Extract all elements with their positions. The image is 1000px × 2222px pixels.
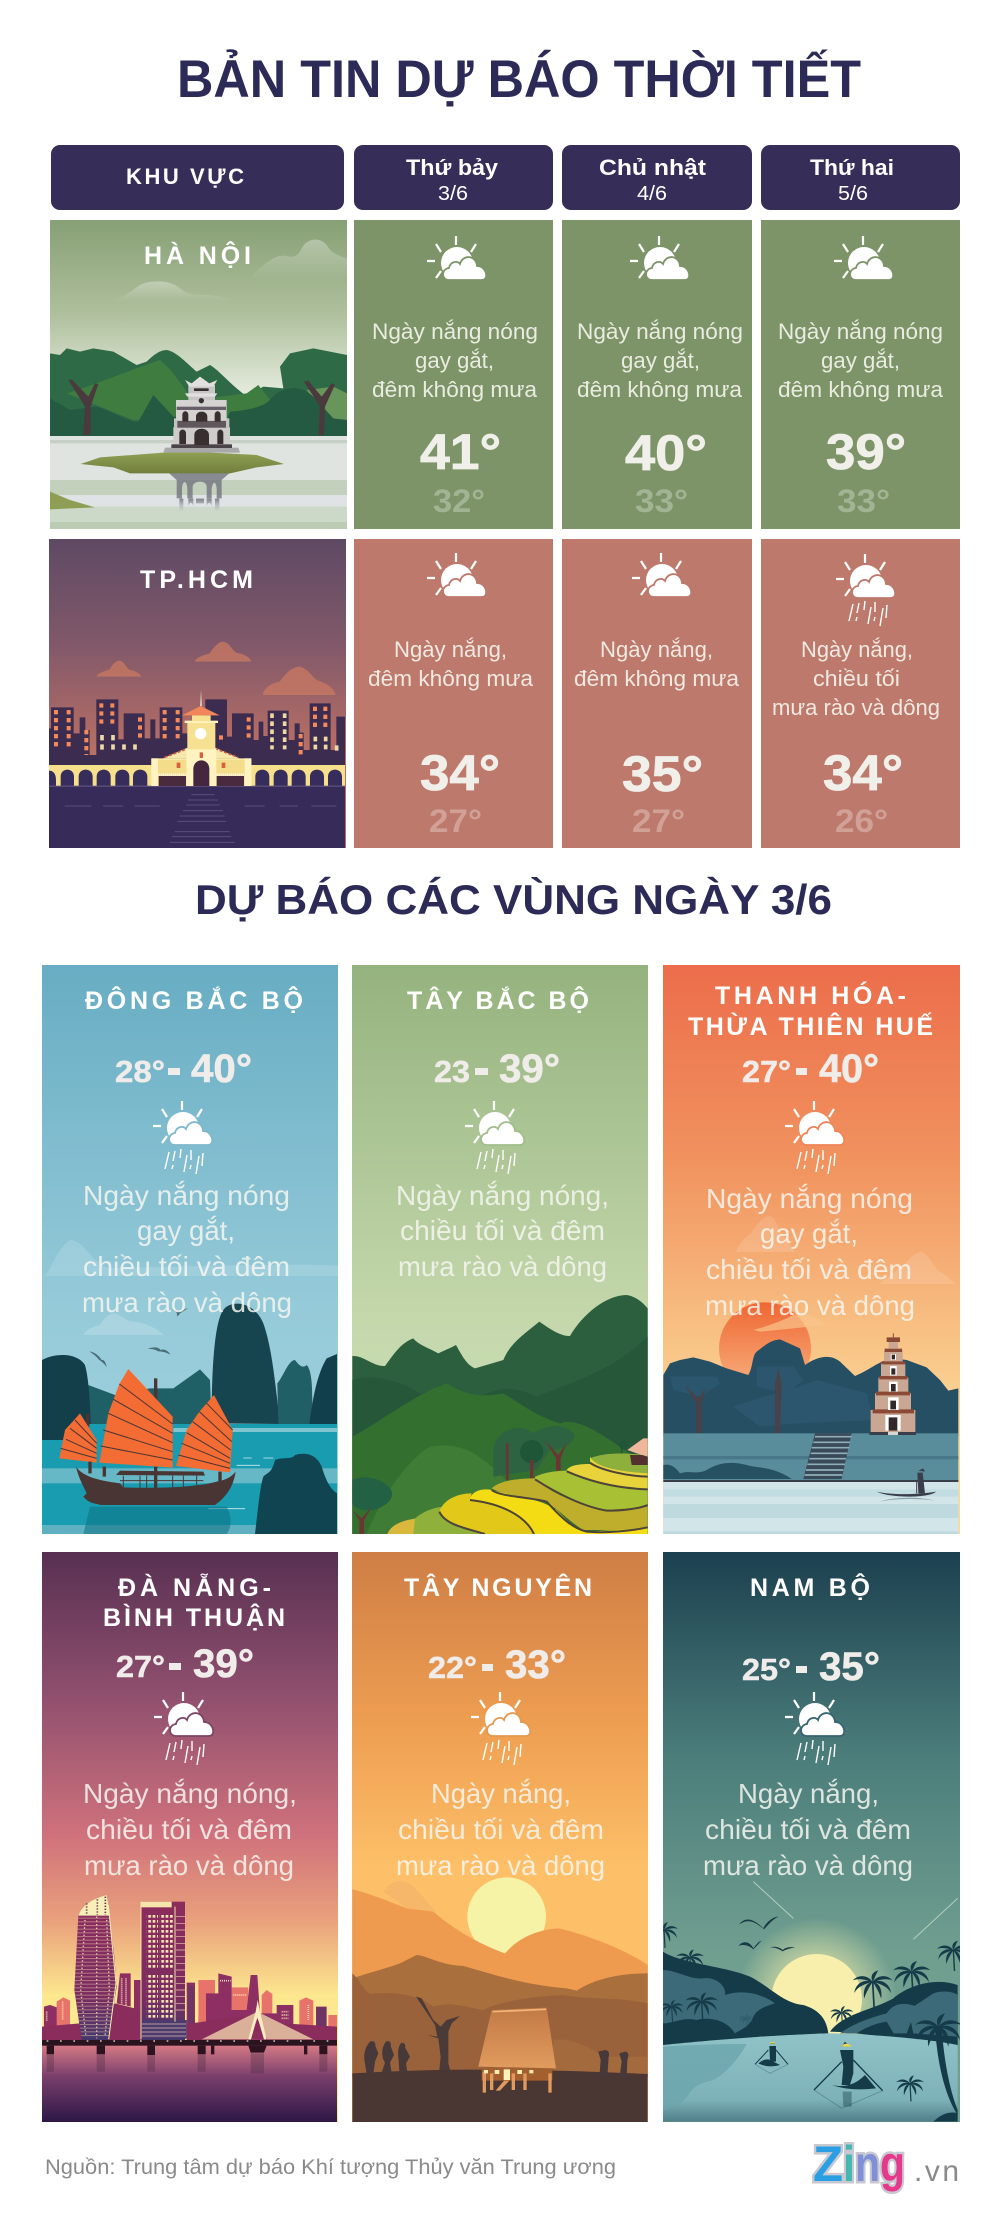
weather cell: Hà Nội Chủ nhật: 33° <box>635 483 688 519</box>
weather cell: Hà Nội Thứ bảy: gay gắt, <box>415 348 494 373</box>
forecast text: chiều tối và đêm <box>400 1215 605 1246</box>
heading: Hà Nội: HÀ NỘI <box>144 240 251 270</box>
logo: Zing.vn: i <box>843 2136 855 2192</box>
temperature range: 27° <box>742 1054 791 1089</box>
icon: sun, cloud and rain <box>153 1101 212 1174</box>
logo: Zing.vn: n <box>855 2136 880 2192</box>
temperature range: 40° <box>191 1047 252 1091</box>
logo: Zing.vn: .vn <box>914 2155 959 2188</box>
panel: TP.HCM illustration <box>49 539 346 848</box>
forecast text: gay gắt, <box>137 1215 235 1246</box>
section heading: DỰ BÁO CÁC VÙNG NGÀY 3/6 <box>195 875 832 923</box>
forecast text: mưa rào và dông <box>703 1850 913 1881</box>
forecast text: mưa rào và dông <box>82 1287 292 1318</box>
icon: sun, cloud and rain <box>465 1101 524 1174</box>
weather cell: Hà Nội Thứ hai: gay gắt, <box>821 348 900 373</box>
header: thứ hai: 5/6 <box>838 183 868 205</box>
weather cell: TP.HCM Thứ hai: 34° <box>823 745 903 801</box>
icon: Bến Thành market <box>151 690 251 786</box>
weather cell: Hà Nội Thứ bảy: đêm không mưa <box>372 377 538 402</box>
temperature range: 28° <box>115 1054 165 1089</box>
weather cell: TP.HCM Thứ hai: mưa rào và dông <box>772 695 940 720</box>
header: thứ hai <box>761 145 960 210</box>
weather cell: Hà Nội Chủ nhật: 40° <box>625 425 707 481</box>
icon: birds <box>89 1308 188 1367</box>
header: chủ nhật: Chủ nhật <box>599 155 707 180</box>
heading: Thanh Hóa - Thừa Thiên Huế: THANH HÓA- <box>715 980 906 1010</box>
icon: boats <box>755 2042 883 2108</box>
forecast text: chiều tối và đêm <box>86 1814 292 1845</box>
forecast text: Ngày nắng, <box>738 1778 879 1809</box>
header: thứ bảy <box>354 145 553 210</box>
icon: left tower <box>74 1895 117 2040</box>
temperature range: 25° <box>742 1652 791 1687</box>
weather cell: Hà Nội Thứ hai <box>761 220 960 529</box>
heading: TP.HCM: TP.HCM <box>140 566 253 594</box>
source note: Nguồn: Trung tâm dự báo Khí tượng Thủy văn Trung ương <box>45 2156 616 2179</box>
temperature range: 23 <box>434 1054 470 1089</box>
header: khu vực: KHU VỰC <box>126 164 244 189</box>
weather cell: TP.HCM Chủ nhật: 35° <box>622 746 703 802</box>
weather cell: TP.HCM Thứ hai: Ngày nắng, <box>801 637 913 662</box>
icon: long house <box>478 2008 556 2093</box>
temperature range <box>116 1054 251 1083</box>
icon: sun, cloud and rain <box>785 1101 844 1174</box>
weather cell: TP.HCM Thứ bảy: đêm không mưa <box>368 666 534 691</box>
forecast text <box>703 1778 913 1881</box>
heading: Đà Nẵng - Bình Thuận: BÌNH THUẬN <box>103 1602 285 1632</box>
icon: rice terraces <box>387 1454 648 1534</box>
heading: Tây Bắc Bộ: TÂY BẮC BỘ <box>407 985 589 1015</box>
temperature range: 40° <box>819 1047 879 1091</box>
header: chủ nhật <box>562 145 752 210</box>
temperature range: 35° <box>819 1645 880 1689</box>
title: BẢN TIN DỰ BÁO THỜI TIẾT <box>177 49 861 109</box>
temperature range <box>116 1648 253 1678</box>
panel: Đông Bắc Bộ <box>42 965 338 1534</box>
forecast text: Ngày nắng, <box>431 1778 571 1809</box>
heading: Nam Bộ: NAM BỘ <box>750 1572 870 1602</box>
icon: junk boat <box>59 1369 236 1505</box>
icon: foreground palms <box>896 2013 962 2122</box>
forecast text: Ngày nắng nóng <box>83 1180 290 1211</box>
forecast text: chiều tối và đêm <box>83 1251 290 1282</box>
temperature range: 27° <box>116 1649 165 1684</box>
weather cell: Hà Nội Chủ nhật: đêm không mưa <box>577 377 743 402</box>
header: thứ hai: Thứ hai <box>810 155 894 180</box>
forecast text: chiều tối và đêm <box>398 1814 604 1845</box>
icon: trees <box>352 1426 628 1534</box>
weather cell: TP.HCM Thứ bảy: 27° <box>429 803 482 839</box>
icon: Thiên Mụ pagoda <box>869 1333 916 1435</box>
icon: sun, cloud and rain <box>471 1692 530 1765</box>
forecast text: mưa rào và dông <box>398 1251 607 1282</box>
temperature range <box>428 1643 566 1687</box>
panel: Tây Nguyên <box>352 1552 648 2124</box>
temperature range: 39° <box>499 1047 560 1091</box>
forecast text <box>83 1778 297 1881</box>
icon: boat and rower <box>877 1468 936 1502</box>
panel: Đà Nẵng - Bình Thuận <box>42 1552 338 2123</box>
icon: bare tree <box>416 1997 460 2070</box>
temperature range <box>742 1054 878 1083</box>
panel: Tây Bắc Bộ <box>352 965 648 1534</box>
weather cell: Hà Nội Thứ hai: 39° <box>826 424 906 480</box>
weather cell: Hà Nội Thứ hai: 33° <box>837 483 890 519</box>
heading: Thanh Hóa - Thừa Thiên Huế <box>688 982 932 1035</box>
icon: walking people <box>364 2041 628 2074</box>
weather cell: TP.HCM Thứ hai <box>761 539 960 848</box>
panel: Nam Bộ <box>650 1552 970 2122</box>
forecast text <box>705 1183 915 1321</box>
icon: birds <box>738 1917 795 1951</box>
forecast text: Ngày nắng nóng, <box>83 1778 297 1809</box>
temperature range: 22° <box>428 1650 477 1685</box>
heading: Tây Nguyên: TÂY NGUYÊN <box>404 1572 592 1602</box>
weather cell: Hà Nội Thứ bảy: Ngày nắng nóng <box>372 319 538 344</box>
weather cell: TP.HCM Thứ hai: chiều tối <box>813 666 900 691</box>
logo: Zing.vn: Z <box>813 2136 843 2192</box>
weather cell: TP.HCM Thứ bảy <box>354 539 553 848</box>
weather cell: Hà Nội Thứ bảy: 41° <box>420 424 501 480</box>
header: thứ bảy: 3/6 <box>438 183 468 205</box>
weather cell: TP.HCM Chủ nhật: đêm không mưa <box>574 666 740 691</box>
weather cell: TP.HCM Thứ hai: 26° <box>835 803 888 839</box>
forecast text: mưa rào và dông <box>84 1850 294 1881</box>
panel: Thanh Hóa - Thừa Thiên Huế <box>663 965 960 1534</box>
icon: right tower <box>141 1902 187 2040</box>
icon: stilt house <box>627 1438 648 1465</box>
icon: sun, cloud and rain <box>785 1692 844 1765</box>
weather cell: Hà Nội Chủ nhật: Ngày nắng nóng <box>577 319 743 344</box>
weather cell: Hà Nội Thứ hai: đêm không mưa <box>778 377 944 402</box>
forecast text: chiều tối và đêm <box>706 1254 912 1285</box>
icon: cable-stayed bridge <box>202 2000 313 2039</box>
heading: Thanh Hóa - Thừa Thiên Huế: THỪA THIÊN HUẾ <box>688 1011 933 1041</box>
weather cell: Hà Nội Thứ bảy <box>354 220 553 529</box>
heading: Đà Nẵng - Bình Thuận <box>103 1573 285 1632</box>
temperature range: 33° <box>505 1643 566 1687</box>
table header <box>51 145 960 210</box>
forecast text <box>82 1180 292 1318</box>
forecast text: chiều tối và đêm <box>705 1814 911 1845</box>
temperature range <box>434 1054 559 1083</box>
weather cell: TP.HCM Thứ bảy: Ngày nắng, <box>394 637 507 662</box>
panel: Hà Nội illustration <box>50 220 347 529</box>
weather cell: Hà Nội Thứ bảy: 32° <box>433 483 485 519</box>
forecast text: Ngày nắng nóng <box>706 1183 913 1214</box>
weather cell: TP.HCM Chủ nhật: Ngày nắng, <box>600 637 713 662</box>
temperature range <box>742 1645 880 1689</box>
weather cell: TP.HCM Thứ bảy: 34° <box>420 745 500 801</box>
forecast text <box>396 1180 609 1282</box>
weather cell: TP.HCM Chủ nhật <box>562 539 752 848</box>
heading: Đông Bắc Bộ: ĐÔNG BẮC BỘ <box>85 985 303 1015</box>
forecast text <box>396 1778 605 1881</box>
forecast text: Ngày nắng nóng, <box>396 1180 609 1211</box>
header: khu vực <box>51 145 344 210</box>
weather cell: Hà Nội Thứ hai: Ngày nắng nóng <box>778 319 943 344</box>
icon: sun, cloud and rain <box>154 1692 213 1765</box>
logo: Zing.vn <box>813 2136 959 2192</box>
icon: Turtle Tower <box>163 377 240 453</box>
heading: Đà Nẵng - Bình Thuận: ĐÀ NẴNG- <box>118 1573 271 1602</box>
forecast text: gay gắt, <box>760 1218 858 1249</box>
logo: Zing.vn: g <box>880 2136 905 2192</box>
header: thứ bảy: Thứ bảy <box>406 155 499 180</box>
weather cell: Hà Nội Chủ nhật: gay gắt, <box>621 348 700 373</box>
header: chủ nhật: 4/6 <box>637 183 667 205</box>
temperature range: 39° <box>193 1642 254 1686</box>
weather cell: TP.HCM Chủ nhật: 27° <box>632 803 685 839</box>
weather cell: Hà Nội Chủ nhật <box>562 220 752 529</box>
forecast text: mưa rào và dông <box>396 1850 605 1881</box>
forecast text: mưa rào và dông <box>705 1290 915 1321</box>
